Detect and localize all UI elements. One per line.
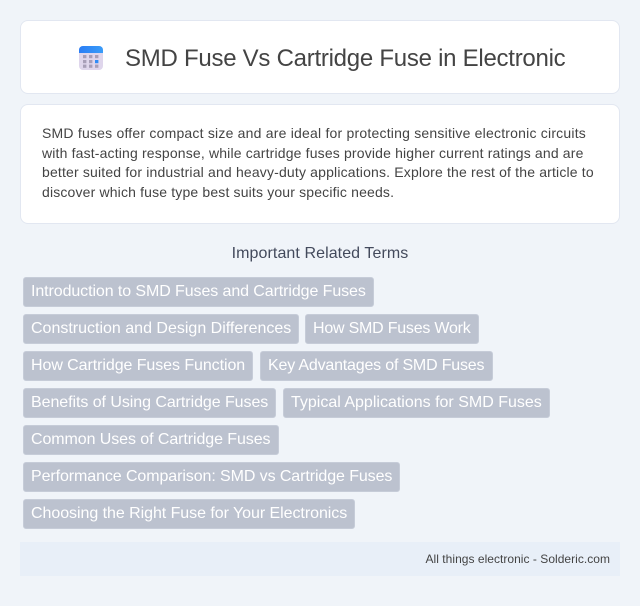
tag (23, 425, 279, 455)
icon: calendar (79, 46, 103, 70)
tag: Performance Comparison: SMD vs Cartridge Fuses (31, 468, 392, 485)
tag list: related terms (23, 277, 550, 529)
footer text: All things electronic - Solderic.com (426, 552, 610, 566)
tag (23, 277, 374, 307)
tag (305, 314, 479, 344)
tag: Typical Applications for SMD Fuses (291, 394, 542, 411)
title: SMD Fuse Vs Cartridge Fuse in Electronic (125, 45, 565, 72)
tag: Choosing the Right Fuse for Your Electronics (31, 505, 347, 522)
text block: summary: SMD fuses offer compact size and are ideal for protecting sensitive electronic circuits (42, 125, 586, 141)
tag: How Cartridge Fuses Function (31, 357, 245, 374)
panel: summary text (20, 104, 620, 224)
text block: summary (42, 125, 594, 200)
text block: summary: with fast-acting response, while cartridge fuses provide higher current ratings and are (42, 145, 584, 161)
heading: related terms: Important Related Terms (232, 245, 408, 262)
tag: Benefits of Using Cartridge Fuses (31, 394, 268, 411)
tag (23, 314, 299, 344)
footer bar (20, 542, 620, 576)
tag (283, 388, 550, 418)
tag (23, 499, 355, 529)
tag: Key Advantages of SMD Fuses (268, 357, 484, 374)
text block: summary: better suited for industrial and heavy-duty applications. Explore the rest of the article to (42, 164, 594, 180)
tag: Construction and Design Differences (31, 320, 291, 337)
tag (260, 351, 493, 381)
tag: How SMD Fuses Work (313, 320, 471, 337)
panel: title card (20, 20, 620, 94)
tag: Common Uses of Cartridge Fuses (31, 431, 270, 448)
tag (23, 462, 400, 492)
tag (23, 351, 253, 381)
tag: Introduction to SMD Fuses and Cartridge Fuses (31, 283, 366, 300)
tag (23, 388, 276, 418)
text block: summary: discover which fuse type best suits your specific needs. (42, 184, 394, 200)
